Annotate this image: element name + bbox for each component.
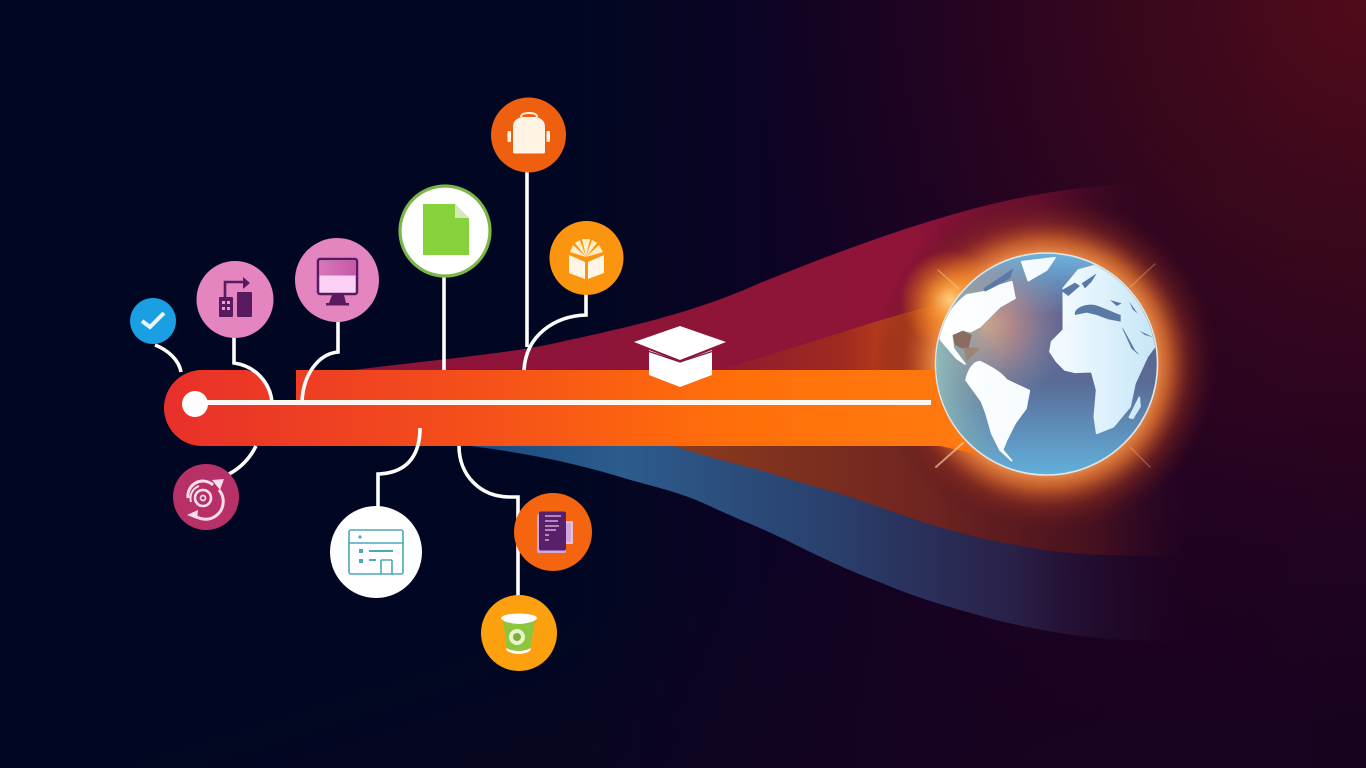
icon: green document badge [400,186,490,276]
icon: browser window badge [330,506,422,598]
icon: monitor badge [295,238,379,322]
ocean [936,253,1158,475]
bar tail wedge [940,446,990,457]
icon: buildings badge [196,261,274,338]
timeline white line [182,391,931,417]
main orange timeline bar [164,370,965,446]
brown wave band [670,445,1190,556]
icon: target badge [173,464,239,530]
icon: cup badge [481,595,557,671]
icon: notebook badge [514,493,592,571]
icon: open book badge [550,221,624,295]
gulf of mexico [953,331,972,348]
continents [938,258,1163,461]
globe glow [874,192,1218,536]
globe light sparkles [936,264,1155,467]
rust wave band [715,290,1020,372]
icon: graduation cap [634,326,726,387]
icon: pot badge [491,98,566,172]
blue wave band [470,446,1190,642]
dark seas [983,268,1153,354]
globe [936,253,1163,475]
crimson wave band [345,183,1150,372]
icon: check badge [130,298,176,344]
connector lines [155,170,586,598]
